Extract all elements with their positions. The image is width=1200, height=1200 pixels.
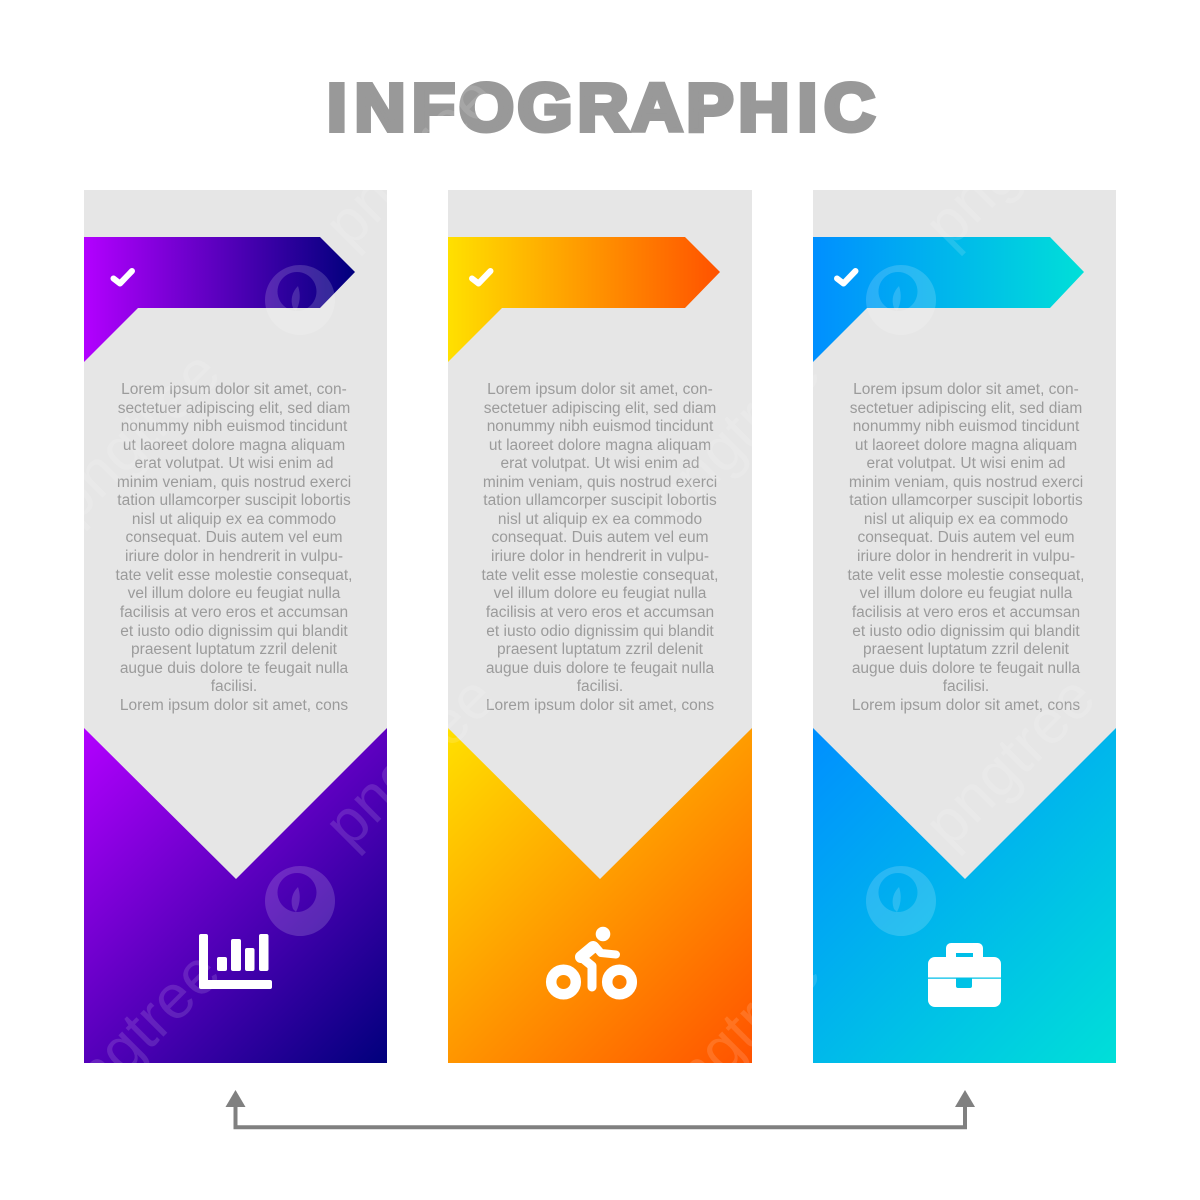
panel 2 text block: Lorem ipsum dolor sit amet, cons — [486, 697, 714, 714]
icon: check mark 3 — [837, 271, 856, 284]
panel 2 text block: vel illum dolore eu feugiat nulla — [494, 585, 707, 602]
panel 2 text block: nonummy nibh euismod tincidunt — [487, 418, 714, 435]
panel 1 text block: et iusto odio dignissim qui blandit — [120, 623, 348, 640]
panel 3 text block: facilisi. — [943, 678, 989, 695]
panel 3 text block: facilisis at vero eros et accumsan — [852, 604, 1080, 621]
panel 2 text block: praesent luptatum zzril delenit — [497, 641, 704, 658]
panel 2 text block: facilisi. — [577, 678, 623, 695]
text: pngtree — [636, 937, 834, 1135]
panel 3 background — [813, 190, 1116, 1063]
panel 1 text block: Lorem ipsum dolor sit amet, con- — [121, 381, 347, 398]
panel 1 text block: facilisi. — [211, 678, 257, 695]
panel 2 text block: ut laoreet dolore magna aliquam — [489, 437, 711, 454]
panel 3 chevron base — [813, 728, 1116, 1063]
panel 1 text block: augue duis dolore te feugait nulla — [120, 660, 349, 677]
panel 1 chevron base — [84, 728, 387, 1063]
panel 3 text block: praesent luptatum zzril delenit — [863, 641, 1070, 658]
panel 1 text block: tation ullamcorper suscipit lobortis — [117, 492, 351, 509]
text: pngtree — [636, 337, 834, 535]
panel 3 text block: nonummy nibh euismod tincidunt — [853, 418, 1080, 435]
panel 2 background — [448, 190, 752, 1063]
panel 1 text block: Lorem ipsum dolor sit amet, cons — [120, 697, 348, 714]
text: pngtree — [311, 62, 509, 260]
panel 2 text block: nisl ut aliquip ex ea commodo — [498, 511, 702, 528]
panel 1 text block: nisl ut aliquip ex ea commodo — [132, 511, 336, 528]
panel 1 ribbon — [84, 237, 355, 362]
panel 1 text block: praesent luptatum zzril delenit — [131, 641, 338, 658]
panel 3 text block: Lorem ipsum dolor sit amet, cons — [852, 697, 1080, 714]
icon: bar chart — [199, 934, 272, 989]
panel 2 text block: Lorem ipsum dolor sit amet, con- — [487, 381, 713, 398]
icon: cyclist — [551, 927, 632, 994]
panel 3 ribbon — [813, 237, 1084, 362]
icon: check mark 2 — [472, 271, 490, 284]
panel 2 chevron base — [448, 728, 752, 1063]
panel 2 text block: facilisis at vero eros et accumsan — [486, 604, 714, 621]
panel 1 text block: consequat. Duis autem vel eum — [125, 529, 343, 546]
text: pngtree — [911, 62, 1109, 260]
panel 2 text block: augue duis dolore te feugait nulla — [486, 660, 715, 677]
panel: column 3 — [813, 190, 1116, 1063]
panel 1 text block: nonummy nibh euismod tincidunt — [121, 418, 348, 435]
text: pngtree — [311, 662, 509, 860]
text: pngtree — [911, 662, 1109, 860]
panel 3 text block: minim veniam, quis nostrud exerci — [849, 474, 1083, 491]
panel 3 text block: consequat. Duis autem vel eum — [857, 529, 1075, 546]
panel 1 text block — [116, 381, 352, 714]
panel 2 text block: iriure dolor in hendrerit in vulpu- — [491, 548, 709, 565]
panel 3 text block: erat volutpat. Ut wisi enim ad — [866, 455, 1066, 472]
panel 1 text block: ut laoreet dolore magna aliquam — [123, 437, 345, 454]
panel 1 text block: minim veniam, quis nostrud exerci — [117, 474, 351, 491]
panel 1 text block: vel illum dolore eu feugiat nulla — [128, 585, 341, 602]
panel 3 text block: nisl ut aliquip ex ea commodo — [864, 511, 1068, 528]
panel 3 text block — [848, 381, 1084, 714]
icon: briefcase — [928, 943, 1001, 1007]
panel 3 text block: tation ullamcorper suscipit lobortis — [849, 492, 1083, 509]
panel 3 text block: vel illum dolore eu feugiat nulla — [860, 585, 1073, 602]
panel: column 2 — [448, 190, 752, 1063]
panel 2 text block: minim veniam, quis nostrud exerci — [483, 474, 717, 491]
arrow: connector between columns — [226, 1090, 975, 1127]
panel 1 text block: tate velit esse molestie consequat, — [116, 567, 352, 584]
text: pngtree — [36, 937, 234, 1135]
panel 2 text block: consequat. Duis autem vel eum — [491, 529, 709, 546]
text: pngtree — [36, 337, 234, 535]
panel 3 text block: et iusto odio dignissim qui blandit — [852, 623, 1080, 640]
panel 3 text block: tate velit esse molestie consequat, — [848, 567, 1084, 584]
panel 2 text block: tate velit esse molestie consequat, — [482, 567, 718, 584]
panel 1 background — [84, 190, 387, 1063]
title: INFOGRAPHIC — [327, 70, 875, 145]
panel 2 text block: erat volutpat. Ut wisi enim ad — [500, 455, 700, 472]
icon: check mark 1 — [114, 271, 132, 284]
panel 2 text block: tation ullamcorper suscipit lobortis — [483, 492, 717, 509]
panel 3 text block: Lorem ipsum dolor sit amet, con- — [853, 381, 1079, 398]
panel 2 text block: sectetuer adipiscing elit, sed diam — [484, 400, 716, 417]
panel 1 text block: sectetuer adipiscing elit, sed diam — [118, 400, 350, 417]
panel 1 text block: iriure dolor in hendrerit in vulpu- — [125, 548, 343, 565]
panel 2 text block — [482, 381, 718, 714]
panel 3 text block: augue duis dolore te feugait nulla — [852, 660, 1081, 677]
panel: column 1 — [84, 190, 387, 1063]
panel 2 ribbon — [448, 237, 720, 362]
panel 1 text block: erat volutpat. Ut wisi enim ad — [134, 455, 334, 472]
panel 2 text block: et iusto odio dignissim qui blandit — [486, 623, 714, 640]
panel 3 text block: iriure dolor in hendrerit in vulpu- — [857, 548, 1075, 565]
panel 1 text block: facilisis at vero eros et accumsan — [120, 604, 348, 621]
panel 3 text block: sectetuer adipiscing elit, sed diam — [850, 400, 1082, 417]
panel 3 text block: ut laoreet dolore magna aliquam — [855, 437, 1077, 454]
